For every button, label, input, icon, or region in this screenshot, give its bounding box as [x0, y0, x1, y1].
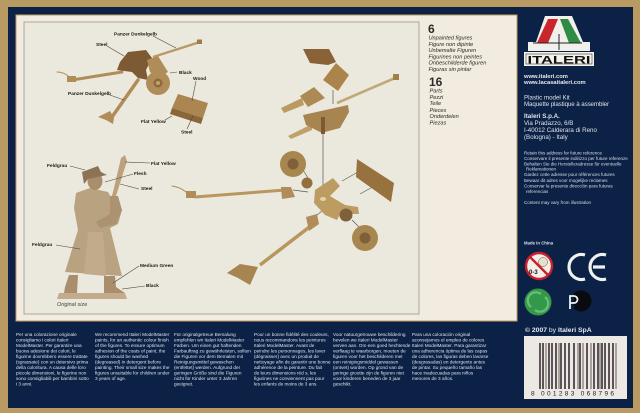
gun paint labels: [68, 32, 206, 136]
icon: CE mark: [569, 254, 606, 280]
made in china: Made in China: [524, 240, 554, 246]
cap: [82, 166, 107, 184]
text column: French: de leurs dimensions réd s, les: [254, 370, 317, 376]
text column: German: geringen Größe sind die Figuren: [174, 370, 242, 376]
parts count block: [429, 75, 459, 126]
barrel: [153, 40, 202, 57]
text column: German: geeignet.: [174, 382, 193, 386]
figures count block: Figure non dipinte: [428, 42, 473, 48]
text column: Italian: piccole dimensioni, le figurine non: [16, 370, 87, 376]
text column: French: adhérence de la peinture. Du fait: [254, 365, 323, 370]
parts count block: 16: [429, 75, 443, 89]
company details: Italeri S.p.A.: [524, 113, 560, 120]
text column: French: [254, 332, 331, 386]
right wheel: [352, 225, 378, 251]
lower shield plate: [356, 159, 394, 202]
text column: Dutch: [333, 332, 411, 386]
text column: Spanish: Para una coloración original: [412, 332, 470, 337]
text column: Italian: sono consigliabili per bambini sotto: [16, 376, 89, 381]
text column: French: (dégraisser) avec un produit de: [254, 354, 319, 359]
breech and shield: [117, 50, 168, 80]
illustration: soldier figure: [57, 155, 127, 299]
text column: Spanish: aconsejamos el empleo de colores: [412, 338, 485, 342]
text column: German: die Figuren vor dem Bemalen mit: [174, 354, 244, 359]
text column: Dutch: Voor natuurgetrouwe beschildering: [333, 332, 406, 337]
text column: Spanish: (desgrasadas) en detergente antes: [412, 360, 486, 364]
gun paint labels: Steel: [96, 42, 107, 48]
carriage: [302, 178, 359, 222]
address notice: Reklamationen: [526, 166, 557, 172]
figures count block: Unbemalte Figuren: [428, 48, 476, 54]
text column: Spanish: menores de 3 años.: [412, 376, 453, 381]
text column: Spanish: hace inadecuadas para niños: [412, 370, 474, 376]
panel: illustration sheet: [16, 15, 517, 321]
address notice: Bewaar dit adres voor mogelijke reclames: [524, 178, 608, 183]
text column: German: (entfettet) werden. Aufgrund der: [174, 365, 241, 370]
company details: Via Pradazzo, 6/B: [524, 120, 573, 127]
soldier paint labels: Feldgrau: [47, 163, 67, 169]
text column: Italian: ModelMaster. Per garantire una: [16, 343, 82, 348]
text column: German: Farbauftrag zu gewährleisten, sollten: [174, 348, 251, 354]
shield upper: [303, 49, 336, 65]
text column: German: [174, 332, 251, 386]
assembly lines: [293, 90, 378, 228]
gun paint labels: Wood: [193, 76, 206, 82]
soldier paint labels: Flat Yellow: [151, 161, 176, 167]
address notice: Conservar la presente dirección para futuras: [524, 184, 614, 188]
soldier paint labels: Feldgrau: [32, 242, 52, 248]
figures count block: 6: [428, 22, 435, 36]
illustration: assembled gun: [57, 40, 208, 124]
address notice: Content may vary from illustration: [524, 200, 592, 205]
text column: Spanish: de pintar. Su pequeño tamaño las: [412, 365, 483, 370]
company details: www.italeri.com: [523, 74, 568, 80]
company details: Maquette plastique à assembler: [524, 101, 609, 108]
barrel: [337, 74, 399, 103]
figure base: [57, 293, 127, 299]
text column: French: figurines ne conviennent pas pour: [254, 376, 325, 381]
soldier paint labels: Black: [146, 283, 159, 289]
cradle: [288, 105, 349, 139]
icon: not for under 3: 0-3: [529, 270, 538, 276]
text column: Italian: [16, 332, 89, 386]
barcode: 8 001283 068796: [531, 390, 614, 398]
lower trail: [98, 80, 138, 124]
text column: Italian: buona adesione dei colori, le: [16, 348, 76, 354]
text column: French: les enfants de moins de 3 ans.: [254, 382, 318, 386]
text column: English: (degreased) in detergent before: [95, 360, 161, 364]
company details: (Bologna) - Italy: [524, 134, 569, 141]
wheel: [146, 71, 170, 95]
text column: Dutch: verven aan. Om een goed hechtende: [333, 343, 411, 348]
text column: Spanish: [412, 332, 489, 381]
figures count block: Figuras sin pintar: [428, 67, 473, 73]
soldier paint labels: [32, 161, 176, 289]
parts count block: Onderdelen: [430, 114, 459, 120]
address notice: [524, 150, 628, 205]
text column: French: nettoyage afin de garantir une bonne: [254, 360, 331, 364]
text column: French: Pour un bonne fidélité des couleurs,: [254, 332, 329, 337]
address notice: Behalten Sie die Herstelleradresse für eventuelle: [524, 162, 622, 166]
text column: German: Reinigungsmittel gewaschen: [174, 360, 234, 364]
text column: English: paints, for an authentic colour finish: [95, 338, 169, 342]
gun paint labels: Panzer Dunkelgelb: [68, 91, 111, 97]
parts count block: Parts: [430, 88, 443, 94]
text column: Dutch: geschikt.: [333, 382, 352, 386]
soldier paint labels: Flesh: [134, 171, 147, 177]
parts count block: Piezas: [430, 120, 446, 126]
left wheel: [280, 151, 306, 177]
parts count block: Teile: [430, 101, 441, 107]
text column: Italian: figurine dovrebbero essere trattate: [16, 354, 88, 359]
text column: English: figures should be washed: [95, 354, 149, 359]
logo: Italeri: ITALERI: [528, 54, 590, 66]
text column: German: nicht für Kinder unter 3 Jahren: [174, 376, 237, 381]
text column: English: of the figures. To ensure optimum: [95, 343, 165, 348]
company details: www.lacasaitaleri.com: [523, 80, 586, 86]
soldier paint labels: Steel: [141, 186, 152, 192]
ammo box: [170, 94, 208, 124]
barcode: [524, 336, 627, 399]
text column: Italian: i 3 anni.: [16, 382, 32, 386]
text column: Dutch: voor kinderen beneden de 3 jaar: [333, 376, 401, 381]
left trail part: [172, 186, 295, 199]
text column: German: Farben. Um einen gut haftenden: [174, 343, 242, 348]
gun paint labels: Steel: [181, 130, 192, 136]
text column: Dutch: een reinigingsmiddel gewassen: [333, 360, 399, 364]
icon: not for under 3: [526, 253, 552, 279]
text column: English: 3 years of age.: [95, 376, 126, 381]
text column: English: adhesion of the coats of paint, the: [95, 348, 166, 354]
parts count block: Pezzi: [430, 95, 444, 101]
text column: English: painting. Their small size makes the: [95, 365, 170, 370]
parts count block: Pieces: [430, 108, 446, 114]
gun paint labels: Flat Yellow: [141, 119, 166, 125]
gun paint labels: Black: [179, 70, 192, 76]
text column: Dutch: figuren voor het beschilderen met: [333, 354, 403, 359]
upper trail: [57, 72, 122, 82]
text column: German: empfehlen wir Italeri ModelMaster: [174, 338, 245, 342]
text column: Italian: Per una colorazione originale: [16, 332, 77, 337]
head: [88, 172, 102, 190]
lower trail part: [227, 214, 319, 285]
text column: Spanish: una adherencia óptima de las capas: [412, 348, 488, 354]
text column: Spanish: de colores, las figuras deben lavarse: [412, 354, 489, 359]
text column: Italian: (sgrassate) con un detersivo prima: [16, 360, 89, 364]
shield lower: [323, 63, 349, 91]
illustration: exploded parts: [172, 49, 399, 285]
text column: English: We recommend Italeri ModelMaster: [95, 332, 170, 337]
icon: recycling P mark: [567, 290, 592, 312]
text column: English: [95, 332, 170, 381]
figures count block: [428, 22, 486, 73]
logo: Italeri: [524, 16, 594, 66]
figures count block: Unpainted figures: [428, 36, 473, 42]
figures count block: Figurines non peintes: [428, 54, 482, 60]
address notice: Conservare il presente indirizzo per future referenze: [524, 156, 628, 161]
address notice: Retain this address for future reference: [524, 150, 603, 156]
copyright: © 2007 by Italeri SpA: [525, 326, 592, 334]
text column: Dutch: bevelen we Italeri ModelMaster: [333, 338, 398, 342]
arm: [96, 196, 122, 228]
icon: green dot: [524, 288, 552, 316]
shovel: [106, 155, 127, 217]
text column: Dutch: geringe grootte zijn de figuren niet: [333, 370, 405, 376]
gun sight: [281, 87, 325, 113]
figures count block: Onbeschilderde figuren: [428, 60, 486, 66]
text column: French: Italeri ModelMaster. Avant de: [254, 343, 315, 348]
text column: Dutch: (ontvet) worden. Op grond van de: [333, 365, 403, 370]
boots: [64, 275, 125, 293]
address notice: referencias: [526, 189, 549, 194]
company details: Plastic model Kit: [524, 94, 570, 102]
text column: English: figures unsuitable for children under: [95, 370, 170, 376]
text column: Italian: della coloritura. A causa delle loro: [16, 365, 86, 370]
text column: Dutch: verflaag te waarborgen, moeten de: [333, 348, 406, 354]
coat: [65, 188, 122, 276]
caption: original size: Original size: [57, 302, 87, 308]
text column: German: Für originalgetreue Bemalung: [174, 332, 236, 337]
text column: Spanish: Italeri ModelMaster. Para garantizar: [412, 343, 487, 348]
soldier paint labels: Medium Green: [140, 263, 173, 269]
address notice: Gardez cette adresse pour références futures: [524, 172, 616, 177]
gun paint labels: Panzer Dunkelgelb: [114, 32, 157, 38]
text column: French: peindre les personnages, les laver: [254, 348, 326, 354]
company details: I-40012 Calderara di Reno: [524, 127, 597, 134]
text column: French: nous recommandons les peintures: [254, 338, 326, 342]
text column: Italian: consigliamo i colori Italeri: [16, 338, 68, 342]
company details: [523, 74, 609, 141]
